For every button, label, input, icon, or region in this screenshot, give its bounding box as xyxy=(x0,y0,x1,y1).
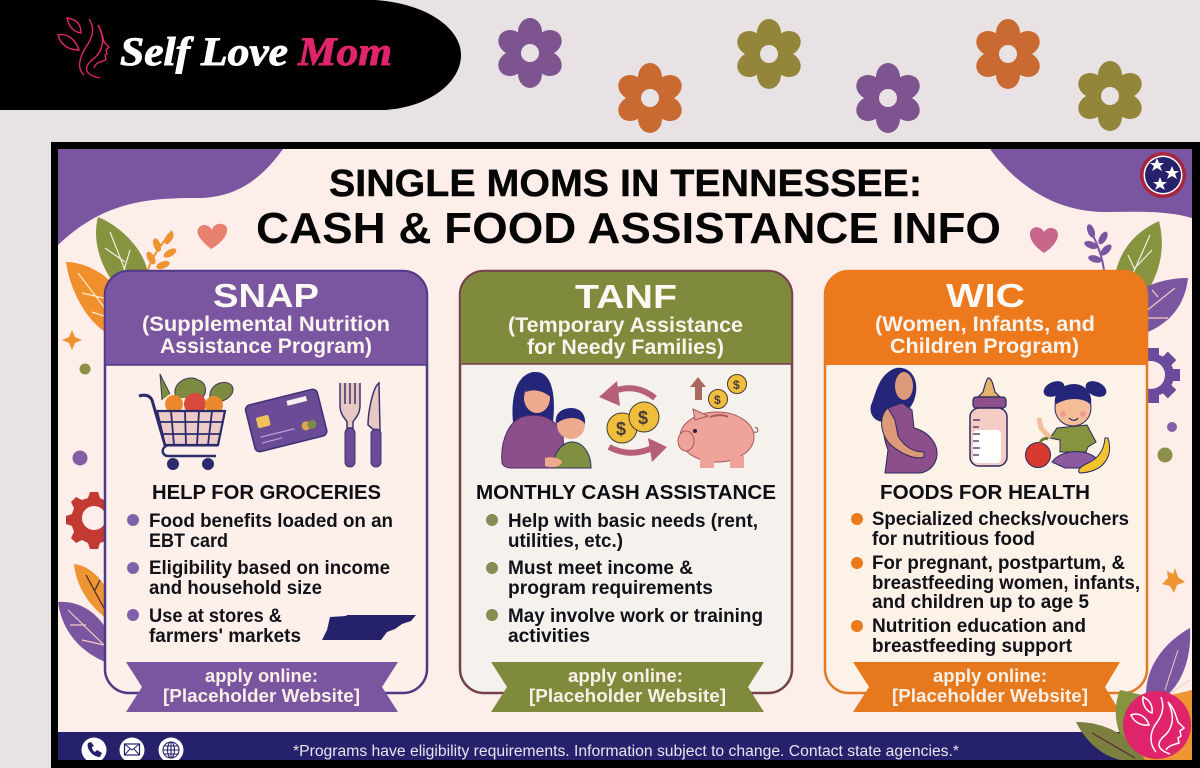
SNAP bullet list: Use at stores & xyxy=(149,606,282,627)
WIC bullet list: Specialized checks/vouchers xyxy=(872,509,1129,530)
decorative flowers row xyxy=(494,18,1146,133)
dot purple right xyxy=(1167,422,1177,432)
SNAP subtitle: (Supplemental Nutrition xyxy=(142,313,390,336)
icon: Tennessee state seal xyxy=(1140,152,1186,198)
TANF subtitle: for Needy Families) xyxy=(527,336,724,359)
icon: purple leaf corner xyxy=(1146,628,1190,705)
TANF subheading: MONTHLY CASH ASSISTANCE xyxy=(476,482,776,504)
icon: shopping cart with vegetables xyxy=(139,374,233,470)
left side decorations xyxy=(58,217,227,665)
WIC subheading: FOODS FOR HEALTH xyxy=(880,482,1090,504)
icon: phone xyxy=(82,738,106,762)
icon: orange sprig xyxy=(144,230,178,271)
WIC apply ribbon: [Placeholder Website] xyxy=(892,686,1088,706)
panel: SNAP xyxy=(105,271,427,712)
TANF card body xyxy=(460,271,792,693)
WIC bullet list xyxy=(851,509,1140,657)
poster background xyxy=(58,149,1192,760)
logo wordmark: Mom xyxy=(297,29,392,74)
panel: WIC xyxy=(825,270,1147,712)
icon: olive leaf corner xyxy=(1116,690,1160,755)
icon: heart right xyxy=(1030,227,1058,253)
icon: baby bottle xyxy=(970,378,1007,466)
icon: olive leaf right xyxy=(1115,221,1162,295)
WIC apply ribbon: apply online: xyxy=(933,666,1047,686)
dot olive right xyxy=(1158,448,1172,462)
TANF apply ribbon: apply online: xyxy=(568,666,683,686)
title: SINGLE MOMS IN TENNESSEE: xyxy=(329,163,922,205)
WIC apply ribbon xyxy=(853,662,1120,712)
icon: mother and child xyxy=(502,372,591,468)
icon: orange leaf xyxy=(66,262,125,340)
icon: orange leaf lower xyxy=(74,564,116,620)
icon: round pink logo badge xyxy=(1123,691,1191,759)
icon: purple sprig xyxy=(1083,223,1113,270)
WIC subtitle: Children Program) xyxy=(890,335,1079,358)
SNAP bullet list: EBT card xyxy=(149,531,228,552)
WIC subtitle: (Women, Infants, and xyxy=(875,313,1095,336)
icon: woman and leaves logo xyxy=(58,18,109,78)
icon: dark olive leaf corner xyxy=(1076,722,1145,760)
icon: orange leaf corner xyxy=(1140,690,1192,760)
icon: coins with circular arrows xyxy=(599,381,667,462)
TANF apply ribbon: [Placeholder Website] xyxy=(529,686,726,706)
SNAP heading: SNAP xyxy=(213,277,319,314)
WIC heading: WIC xyxy=(946,277,1025,314)
icon: purple leaf right xyxy=(1140,278,1188,335)
TANF subtitle xyxy=(508,314,743,359)
SNAP subtitle: Assistance Program) xyxy=(160,335,372,358)
WIC bullet list: and children up to age 5 xyxy=(872,592,1089,613)
SNAP card body xyxy=(105,271,427,693)
icon: piggy bank with coins: $ xyxy=(714,393,721,407)
icon: mail xyxy=(120,738,144,762)
icon: purple leaf lower xyxy=(58,602,118,665)
purple corner blob left xyxy=(58,149,283,245)
logo wordmark xyxy=(120,29,392,74)
title: CASH & FOOD ASSISTANCE INFO xyxy=(256,204,1001,253)
SNAP header band xyxy=(105,271,427,365)
icon: Tennessee map xyxy=(322,615,416,640)
WIC bullet list: For pregnant, postpartum, & xyxy=(872,553,1125,574)
SNAP bullet list xyxy=(127,511,393,647)
WIC bullet list: breastfeeding women, infants, xyxy=(872,573,1140,594)
poster black frame xyxy=(51,142,1200,768)
icon: heart left xyxy=(198,224,227,249)
icon: globe xyxy=(158,738,184,762)
icon: red gear xyxy=(66,492,122,549)
footer contact icons xyxy=(82,738,184,762)
TANF bullet list: May involve work or training xyxy=(508,606,763,627)
SNAP apply ribbon xyxy=(126,662,398,712)
TANF apply ribbon xyxy=(491,662,764,712)
icon: coins with circular arrows: $ xyxy=(638,408,648,428)
SNAP bullet list: Food benefits loaded on an xyxy=(149,511,393,532)
SNAP subheading: HELP FOR GROCERIES xyxy=(152,482,381,504)
panel: TANF xyxy=(460,271,792,712)
right side decorations xyxy=(1030,221,1188,593)
TANF bullet list: activities xyxy=(508,626,590,647)
SNAP bullet list: Eligibility based on income xyxy=(149,558,390,579)
SNAP bullet list: and household size xyxy=(149,578,322,599)
icon: sparkle star xyxy=(62,330,82,350)
WIC bullet list: Nutrition education and xyxy=(872,616,1086,637)
SNAP subtitle xyxy=(142,313,390,358)
bottom right leaf cluster xyxy=(1076,628,1192,760)
WIC card body xyxy=(825,271,1147,693)
TANF bullet list: Must meet income & xyxy=(508,558,693,579)
SNAP bullet list: farmers' markets xyxy=(149,626,301,647)
icon: pregnant woman xyxy=(871,368,937,473)
logo wordmark: Self Love xyxy=(120,29,288,74)
TANF header band xyxy=(460,271,792,364)
header logo banner xyxy=(0,0,461,110)
dot olive xyxy=(80,364,90,374)
footer disclaimer: *Programs have eligibility requirements. Information subject to change. Contact state agencies.* xyxy=(293,743,959,760)
SNAP apply ribbon: apply online: xyxy=(205,666,318,686)
icon: orange star right xyxy=(1162,568,1185,593)
icon: coins with circular arrows: $ xyxy=(616,419,626,439)
icon: fork and knife xyxy=(340,383,381,467)
WIC header band xyxy=(825,270,1147,365)
TANF bullet list xyxy=(486,511,763,647)
TANF bullet list: Help with basic needs (rent, xyxy=(508,511,758,532)
SNAP apply ribbon: [Placeholder Website] xyxy=(163,686,360,706)
icon: purple gear xyxy=(1125,348,1180,403)
purple corner blob right xyxy=(990,149,1192,218)
icon: EBT card xyxy=(244,388,328,453)
TANF bullet list: program requirements xyxy=(508,578,713,599)
icon: olive leaf xyxy=(96,217,148,285)
TANF bullet list: utilities, etc.) xyxy=(508,531,623,552)
TANF subtitle: (Temporary Assistance xyxy=(508,314,743,337)
icon: toddler with fruit xyxy=(1026,378,1110,473)
WIC bullet list: for nutritious food xyxy=(872,529,1035,550)
icon: piggy bank with coins xyxy=(678,374,758,468)
dot purple xyxy=(72,450,88,466)
WIC subtitle xyxy=(875,313,1095,358)
TANF heading: TANF xyxy=(575,278,677,315)
WIC bullet list: breastfeeding support xyxy=(872,636,1073,657)
icon: piggy bank with coins: $ xyxy=(733,378,740,392)
footer bar xyxy=(58,732,1120,760)
title xyxy=(256,163,1001,253)
